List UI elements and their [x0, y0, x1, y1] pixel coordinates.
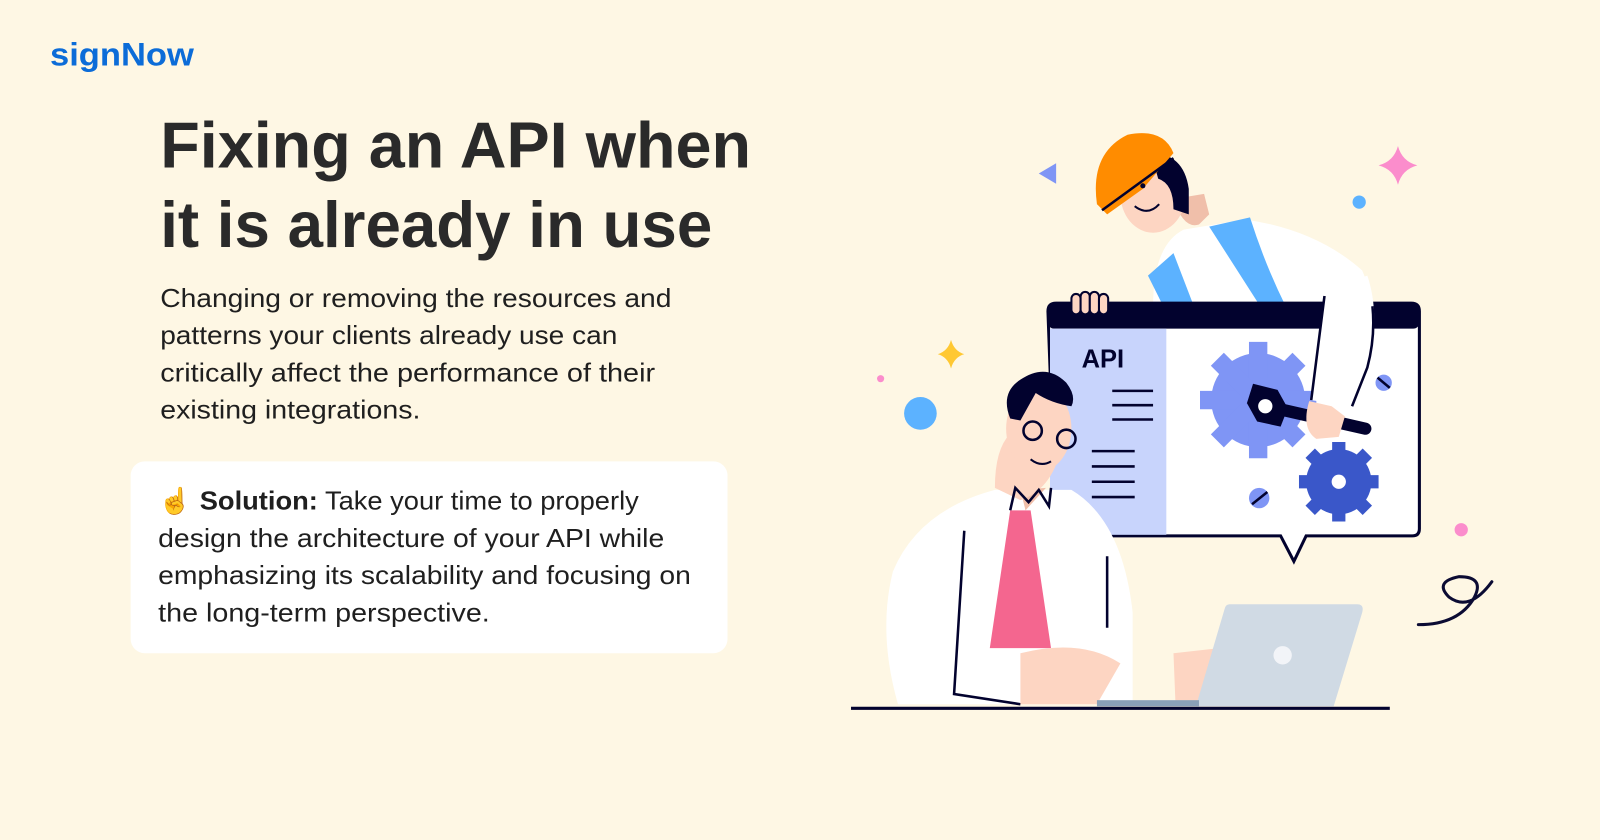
big gear [1200, 342, 1316, 458]
small gear [1299, 442, 1379, 522]
title: it is already in use [160, 188, 712, 261]
fingers on window [1071, 292, 1108, 314]
intro paragraph [160, 285, 671, 424]
intro paragraph: existing integrations. [160, 396, 420, 424]
title [160, 108, 751, 261]
intro paragraph: patterns your clients already use can [160, 322, 617, 350]
man at laptop [886, 372, 1219, 704]
text lines [1092, 391, 1153, 497]
title: Fixing an API when [160, 108, 751, 181]
intro paragraph: Changing or removing the resources and [160, 285, 671, 313]
solution box: design the architecture of your API while [158, 525, 664, 553]
screws [1249, 375, 1392, 508]
decorations [877, 146, 1492, 625]
solution box: ☝ Solution: Take your time to properly [158, 485, 639, 516]
solution box: the long-term perspective. [158, 600, 490, 628]
solution box [131, 461, 728, 653]
desk line [851, 707, 1390, 710]
wrench [1247, 384, 1365, 429]
laptop [1196, 604, 1363, 706]
illustration [851, 133, 1492, 708]
logo: signNow [50, 35, 195, 72]
API label: API [1082, 345, 1124, 373]
API window [1048, 276, 1419, 561]
solution box: emphasizing its scalability and focusing on [158, 562, 691, 590]
engineer arm [1311, 276, 1374, 406]
engineer body [1096, 133, 1371, 337]
engineer hand [1306, 401, 1345, 439]
intro paragraph: critically affect the performance of their [160, 360, 656, 388]
